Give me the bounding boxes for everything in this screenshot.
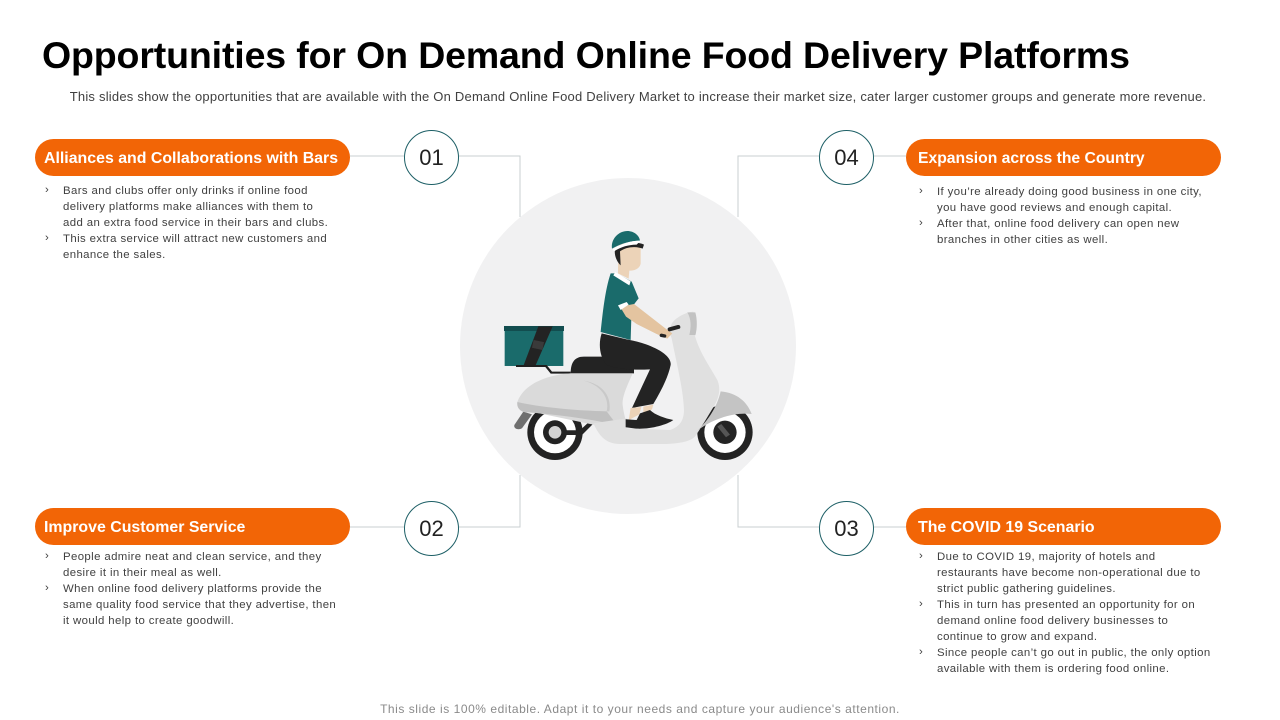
panel: 03 covid bbox=[819, 501, 1221, 675]
bullet text: Bars and clubs offer only drinks if online food bbox=[63, 185, 308, 197]
rear body bbox=[517, 373, 633, 425]
bullet text: Since people can’t go out in public, the only option bbox=[937, 647, 1211, 659]
title: Opportunities for On Demand Online Food Delivery Platforms bbox=[42, 34, 1130, 76]
bullet text: branches in other cities as well. bbox=[937, 234, 1108, 246]
exhaust bbox=[514, 412, 532, 429]
central illustration: delivery rider on scooter bbox=[460, 178, 796, 514]
headlight bbox=[687, 312, 697, 335]
rear panel curve bbox=[583, 381, 610, 411]
heading pill bbox=[906, 508, 1221, 545]
cap bbox=[612, 231, 640, 249]
bullet text: This in turn has presented an opportunity for on bbox=[937, 599, 1195, 611]
delivery box bbox=[504, 326, 571, 374]
bullet text: it would help to create goodwill. bbox=[63, 615, 234, 627]
number badge bbox=[819, 501, 874, 556]
arm bbox=[620, 304, 672, 339]
ankles bbox=[629, 405, 653, 420]
heading pill bbox=[906, 139, 1221, 176]
bullet text: enhance the sales. bbox=[63, 249, 166, 261]
collar bbox=[613, 272, 631, 285]
bullet text: Due to COVID 19, majority of hotels and bbox=[937, 551, 1155, 563]
heading pill bbox=[35, 508, 350, 545]
bullet text: strict public gathering guidelines. bbox=[937, 583, 1116, 595]
seat bbox=[571, 357, 634, 373]
subtitle: This slides show the opportunities that are available with the On Demand Online Food Delivery Market to increase their market size, cater larger customer groups and generate more revenue. bbox=[70, 89, 1206, 104]
heading pill: Expansion across the Country bbox=[918, 150, 1145, 167]
bullet text: After that, online food delivery can open new bbox=[937, 218, 1179, 230]
neck and head bbox=[618, 242, 641, 279]
bullet text: continue to grow and expand. bbox=[937, 631, 1097, 643]
number badge: 04 bbox=[834, 145, 859, 170]
front shield and floor bbox=[593, 312, 719, 444]
bullet text: This extra service will attract new customers and bbox=[63, 233, 327, 245]
panel: 01 alliances bbox=[35, 130, 459, 261]
bullet text bbox=[46, 551, 336, 627]
number badge bbox=[819, 130, 874, 185]
rear wheel bbox=[527, 405, 593, 460]
rider legs bbox=[600, 333, 671, 408]
rear fender stripe bbox=[517, 402, 617, 425]
front fender bbox=[697, 391, 752, 431]
bullet text: When online food delivery platforms provide the bbox=[63, 583, 322, 595]
number badge: 01 bbox=[419, 145, 444, 170]
heading pill: The COVID 19 Scenario bbox=[918, 519, 1095, 536]
bullet text: desire it in their meal as well. bbox=[63, 567, 222, 579]
heading pill bbox=[35, 139, 350, 176]
bullet text bbox=[920, 186, 1202, 246]
panel: 04 expansion bbox=[819, 130, 1221, 246]
bullet text: same quality food service that they advertise, then bbox=[63, 599, 336, 611]
bullet text bbox=[920, 551, 1211, 675]
shoes bbox=[626, 410, 673, 429]
heading pill: Improve Customer Service bbox=[44, 519, 245, 536]
number badge bbox=[404, 501, 459, 556]
number badge: 02 bbox=[419, 516, 444, 541]
heading pill: Alliances and Collaborations with Bars bbox=[44, 150, 338, 167]
bullet text: If you’re already doing good business in one city, bbox=[937, 186, 1202, 198]
bullet text: add an extra food service in their bars and clubs. bbox=[63, 217, 328, 229]
bullet text bbox=[46, 185, 328, 261]
panel: 02 customer service bbox=[35, 501, 459, 627]
bullet text: People admire neat and clean service, and they bbox=[63, 551, 322, 563]
hair bbox=[615, 243, 644, 265]
footer note: This slide is 100% editable. Adapt it to your needs and capture your audience's attention. bbox=[380, 702, 900, 716]
number badge: 03 bbox=[834, 516, 859, 541]
icon: scooter and rider bbox=[504, 231, 753, 460]
bullet text: you have good reviews and enough capital. bbox=[937, 202, 1172, 214]
bullet text: demand online food delivery businesses to bbox=[937, 615, 1168, 627]
bullet text: available with them is ordering food online. bbox=[937, 663, 1169, 675]
handlebar bbox=[670, 327, 678, 329]
torso shirt bbox=[601, 273, 639, 340]
front wheel bbox=[697, 405, 753, 460]
background circle bbox=[460, 178, 796, 514]
bullet text: restaurants have become non-operational due to bbox=[937, 567, 1201, 579]
bullet text: delivery platforms make alliances with them to bbox=[63, 201, 313, 213]
number badge bbox=[404, 130, 459, 185]
